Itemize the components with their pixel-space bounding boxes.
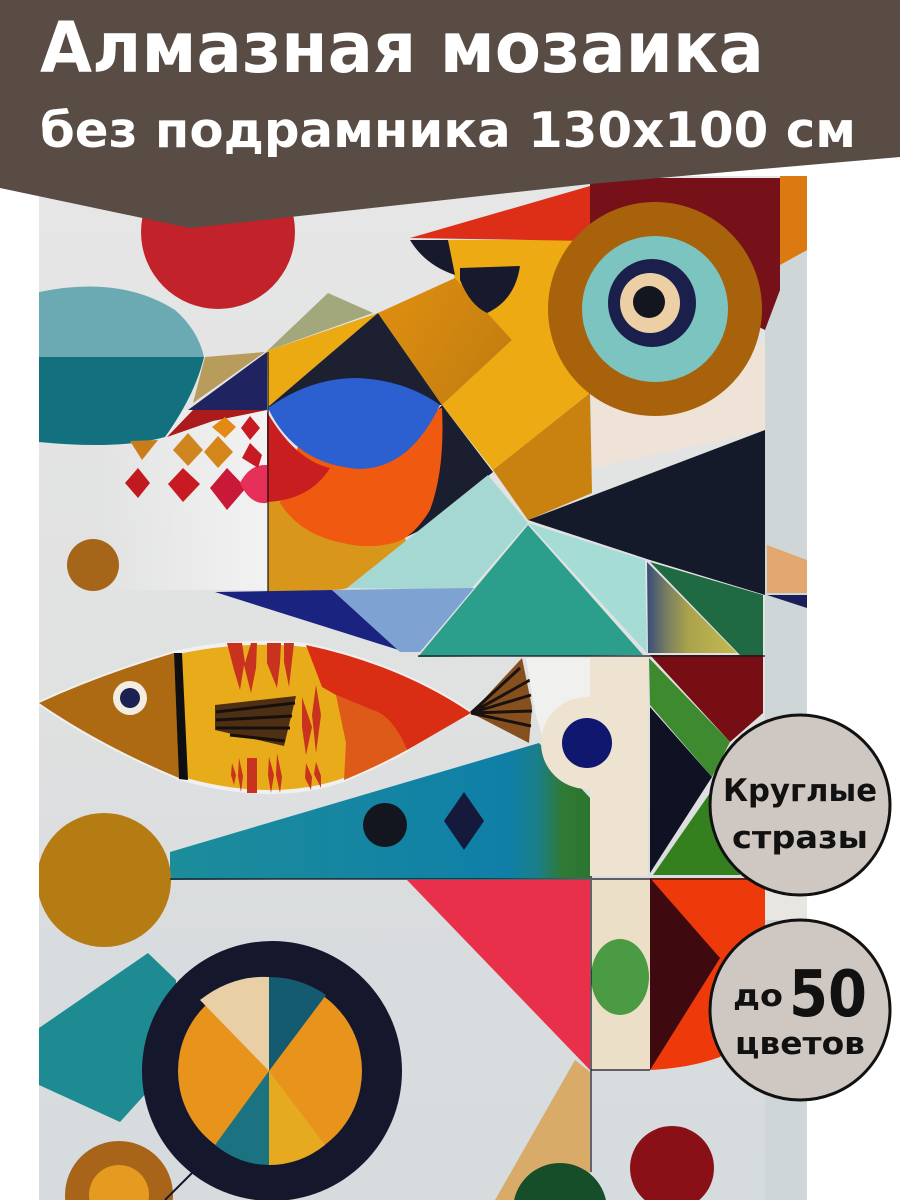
black triangle right — [528, 430, 765, 595]
black arc — [460, 266, 520, 313]
cream column upper — [592, 345, 765, 468]
teal half circle — [39, 286, 204, 445]
cream column middle with blue dot — [541, 656, 648, 876]
right stained panel — [649, 655, 763, 875]
black triangle — [268, 313, 442, 407]
fish — [39, 643, 532, 793]
teal wedge — [170, 743, 592, 880]
badge: round rhinestones — [710, 715, 890, 895]
thin black lines — [170, 352, 765, 1172]
badge: round rhinestones: Круглые — [723, 773, 877, 809]
brown dot — [67, 539, 119, 591]
bottom shapes — [65, 1060, 714, 1200]
badge: up to 50 colors: до — [733, 979, 783, 1014]
yellow triangle — [267, 313, 378, 407]
teal pyramid — [215, 475, 763, 657]
badge: round rhinestones: стразы — [732, 820, 868, 856]
header banner — [0, 0, 900, 228]
fish tail — [471, 658, 532, 743]
badge: up to 50 colors — [710, 920, 890, 1100]
subtitle: без подрамника 130х100 см — [40, 102, 856, 159]
painting: abstract geometric artwork — [37, 155, 807, 1200]
lower-left teal pentagon — [39, 953, 176, 1122]
orange box and yellow shapes — [442, 240, 590, 470]
pale area above column — [526, 658, 590, 734]
wheel — [142, 941, 402, 1200]
top red circle — [141, 216, 295, 309]
diamond pattern — [125, 416, 267, 510]
dark red band — [167, 410, 267, 437]
olive triangle — [267, 293, 373, 351]
central bird shape — [267, 378, 442, 592]
badge: up to 50 colors: 50 — [789, 958, 867, 1032]
ochre circle — [37, 813, 171, 947]
tan wedge — [193, 352, 265, 403]
title: Алмазная мозаика — [40, 7, 764, 89]
top right beak — [410, 186, 590, 241]
fish fin — [215, 696, 296, 746]
red triangles lower — [407, 878, 765, 1070]
badge: up to 50 colors: цветов — [735, 1026, 865, 1062]
bullseye target — [548, 202, 762, 416]
navy wedge — [188, 352, 267, 410]
